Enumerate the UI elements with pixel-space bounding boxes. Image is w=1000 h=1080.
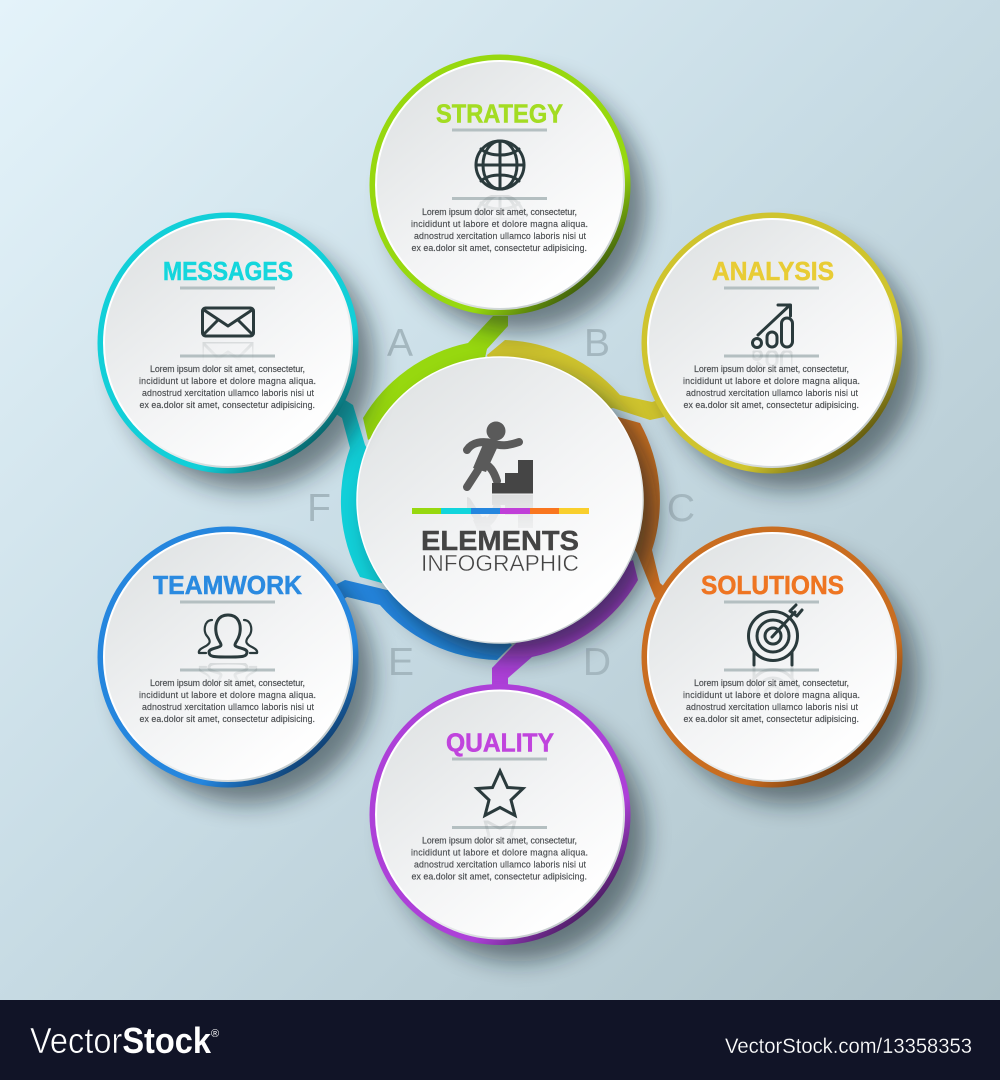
panel: messages — [98, 212, 374, 490]
heading: strategy: STRATEGY — [436, 100, 563, 128]
icon: envelope — [202, 308, 254, 336]
arc: orange C — [600, 417, 668, 598]
body text: ex ea.dolor sit amet, consectetur adipisicing. — [684, 714, 859, 724]
icon: target — [748, 605, 802, 665]
arc: green A — [363, 316, 508, 440]
body text — [411, 836, 588, 882]
heading: teamwork: TEAMWORK — [153, 572, 303, 600]
body text: Lorem ipsum dolor sit amet, consectetur, — [150, 364, 305, 374]
body text: adnostrud xercitation ullamco laboris nisi ut — [686, 702, 859, 712]
rules — [452, 758, 547, 829]
reflection: star — [482, 820, 517, 842]
body text: adnostrud xercitation ullamco laboris nisi ut — [142, 702, 315, 712]
heading: solutions: SOLUTIONS — [701, 572, 844, 600]
heading: analysis: ANALYSIS — [712, 258, 834, 286]
reflection: growth chart — [752, 350, 792, 370]
icon: team — [199, 615, 257, 657]
body text: Lorem ipsum dolor sit amet, consectetur, — [694, 678, 849, 688]
body text: incididunt ut labore et dolore magna aliqua. — [683, 376, 860, 386]
section letters: E — [388, 641, 414, 684]
body text: ex ea.dolor sit amet, consectetur adipisicing. — [412, 872, 587, 882]
rules — [724, 286, 819, 358]
heading: quality: QUALITY — [446, 730, 554, 758]
arc: blue E — [335, 580, 512, 660]
registered mark: ® — [211, 1028, 219, 1040]
connector arcs — [330, 316, 668, 690]
body text: adnostrud xercitation ullamco laboris nisi ut — [142, 388, 315, 398]
reflection of runner — [467, 494, 533, 526]
footer bar — [0, 1000, 1000, 1080]
section letters: C — [667, 487, 695, 530]
reflection: envelope — [202, 342, 254, 354]
body text: Lorem ipsum dolor sit amet, consectetur, — [150, 678, 305, 688]
body text: adnostrud xercitation ullamco laboris nisi ut — [686, 388, 859, 398]
panel: teamwork — [98, 526, 374, 804]
panel: quality — [370, 684, 646, 962]
body text: ex ea.dolor sit amet, consectetur adipisicing. — [140, 714, 315, 724]
body text: incididunt ut labore et dolore magna aliqua. — [139, 690, 316, 700]
footer logo: VectorStock — [30, 1020, 212, 1061]
body text — [411, 207, 588, 253]
subtitle: infographic: INFOGRAPHIC — [421, 550, 579, 576]
body text — [683, 364, 860, 410]
arc: purple D — [492, 560, 638, 690]
section letters: F — [307, 487, 331, 530]
arc: teal F — [330, 400, 400, 583]
center circle — [357, 357, 657, 657]
icon: star — [477, 771, 523, 816]
icon: growth chart — [752, 305, 792, 348]
body text: Lorem ipsum dolor sit amet, consectetur, — [694, 364, 849, 374]
section letters: A — [387, 322, 413, 365]
body text — [139, 364, 316, 410]
body text: ex ea.dolor sit amet, consectetur adipisicing. — [140, 400, 315, 410]
reflection: target — [748, 666, 799, 694]
panel: analysis — [642, 212, 918, 490]
body text: ex ea.dolor sit amet, consectetur adipisicing. — [684, 400, 859, 410]
body text: incididunt ut labore et dolore magna aliqua. — [139, 376, 316, 386]
body text: Lorem ipsum dolor sit amet, consectetur, — [422, 836, 577, 846]
rules — [452, 128, 547, 200]
icon: globe — [476, 141, 524, 189]
icon: runner on stairs — [467, 422, 533, 494]
heading: messages: MESSAGES — [163, 258, 293, 286]
body text: incididunt ut labore et dolore magna aliqua. — [683, 690, 860, 700]
section letters: B — [584, 322, 610, 365]
rules — [724, 600, 819, 672]
panel: strategy — [370, 54, 646, 332]
body text: adnostrud xercitation ullamco laboris nisi ut — [414, 860, 587, 870]
body text: Lorem ipsum dolor sit amet, consectetur, — [422, 207, 577, 217]
panel: solutions — [642, 526, 918, 804]
footer id: VectorStock.com/13358353 — [725, 1035, 972, 1058]
body text: ex ea.dolor sit amet, consectetur adipisicing. — [412, 243, 587, 253]
body text: adnostrud xercitation ullamco laboris nisi ut — [414, 231, 587, 241]
reflection: globe — [476, 195, 524, 219]
section letters — [307, 322, 695, 684]
arc: yellow B — [487, 340, 664, 420]
section letters: D — [583, 641, 611, 684]
body text — [139, 678, 316, 724]
body text: incididunt ut labore et dolore magna aliqua. — [411, 848, 588, 858]
rules — [180, 600, 275, 672]
body text — [683, 678, 860, 724]
reflection: team — [199, 663, 257, 683]
color bar — [412, 508, 589, 514]
body text: incididunt ut labore et dolore magna aliqua. — [411, 219, 588, 229]
title: elements: ELEMENTS — [421, 525, 579, 556]
rules — [180, 286, 275, 358]
